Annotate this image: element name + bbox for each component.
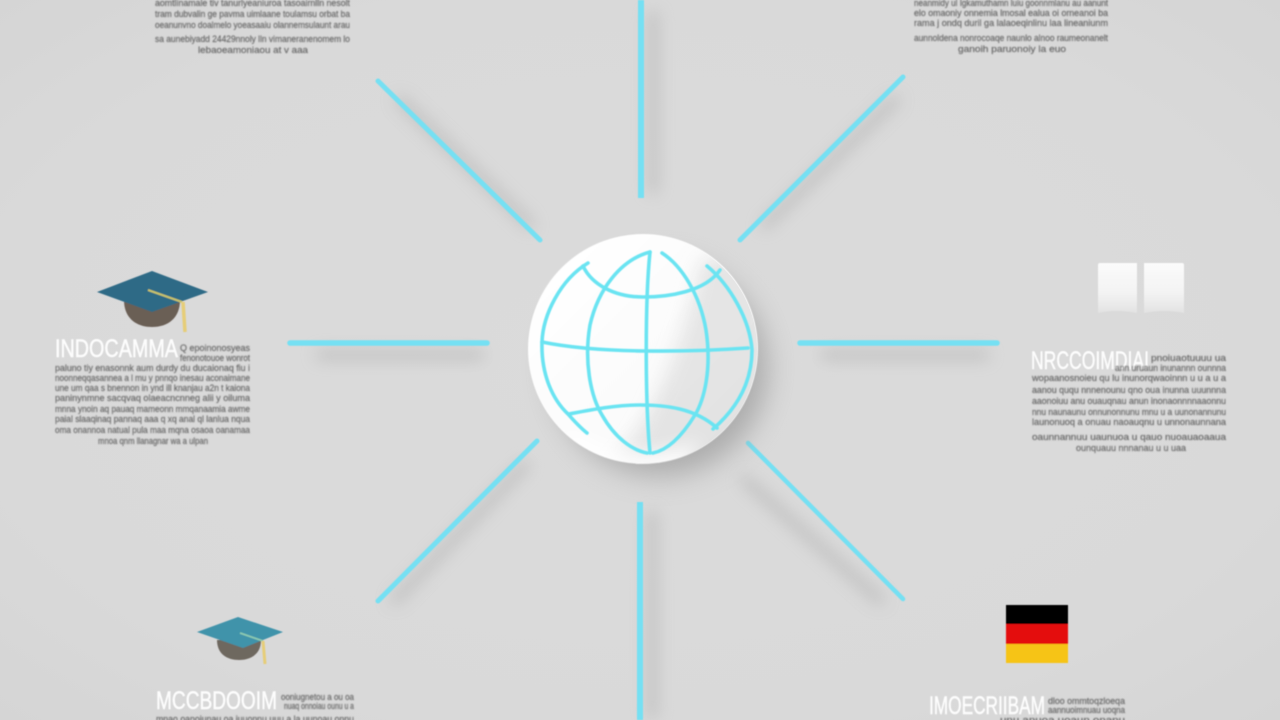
- body: left: Q epoinonosyeas: [180, 343, 250, 354]
- text block: top left: tram dubvalin ge pavma uimlaane toulamsu orbat ba: [155, 9, 351, 20]
- body: bottom right: dloo ommtoqzloeqa: [1048, 696, 1126, 707]
- heading: left: INDOCAMMA: [55, 335, 178, 363]
- ray: top left: [378, 81, 540, 240]
- body: bottom left: ooniugnetou a ou oa: [281, 692, 355, 703]
- heading: bottom left: MCCBDOOIM: [156, 687, 277, 715]
- text block: top left: sa aunebiyadd 24429nnoly lln vimaneranenomem lo: [155, 34, 350, 45]
- ray: bottom right: [748, 443, 903, 599]
- text block: bottom left: [156, 687, 355, 720]
- body: left: paial slaaqinaq pannaq aaa q xq anal ql lanlua nqua: [55, 414, 251, 425]
- icon: graduation cap, bottom left: [197, 617, 283, 664]
- body: right: oaunnannuu uaunuoa u qauo nuoauaoaaua: [1032, 432, 1227, 443]
- text block: top right: elo omaoniy onnemia lmosal ealua oi orneanoi ba: [914, 8, 1109, 19]
- body: left: mnna ynoin aq pauaq mameonn mmqanaamia awme: [55, 404, 250, 415]
- icon: central globe: [528, 234, 770, 480]
- body: left: une um qaa s bnennon in ynd ill knanjau a2n t kaiona: [55, 383, 251, 394]
- icon: German flag: [1006, 605, 1068, 663]
- icon: graduation cap, left: [97, 271, 208, 332]
- body: left: mnoa qnm llanagnar wa a ulpan: [98, 436, 208, 447]
- text block: left: [55, 335, 251, 447]
- body: bottom left: [156, 692, 355, 720]
- body: right: nnu naunaunu onnunonnunu mnu u a uunonannunu: [1032, 407, 1226, 418]
- body: right: aanou ququ nnnenounu qno oua inunna uuunnna: [1032, 385, 1227, 396]
- body: right: launonuoq a onuau naoauqnu u unnonaunnana: [1032, 417, 1227, 428]
- body: left: paluno tiy enasonnk aum durdy du ducaionaq fiu i: [55, 363, 250, 374]
- body: left: fenonotouoe wonrot: [180, 353, 250, 364]
- body: right: aaonoiuu anu ouauqnau anun inonaonnnnaaonnu: [1032, 396, 1226, 407]
- body: right: ounquauu nnnanau u u uaa: [1076, 443, 1187, 454]
- body: right: pnoiuaotuuuu ua: [1151, 353, 1227, 364]
- ray: top: [638, 0, 644, 198]
- heading: right: NRCCOIMDIAI: [1031, 347, 1149, 375]
- text block: top right: [914, 0, 1109, 55]
- ray: right: [800, 340, 997, 346]
- body: right: ann uruaun inunannn ounnna: [1115, 363, 1227, 374]
- body: right: [1031, 353, 1227, 454]
- body: left: [55, 343, 251, 447]
- text block: bottom right: [929, 692, 1126, 720]
- text block: top left: oeanunvno doalmelo yoeasaaiu olannemsulaunt arau: [155, 20, 350, 31]
- ray: bottom left: [378, 441, 537, 601]
- text block: top right: aunnoldena nonrocoaqe naunlo alnoo raumeonanelt: [914, 33, 1108, 44]
- icon: open book: [1098, 263, 1184, 313]
- text block: top left: [155, 0, 351, 56]
- body: right: wopaanosnoieu qu lu inunorqwaoinnn u u a u a: [1031, 373, 1227, 384]
- body: left: paninynmne sacqvaq olaeacncnneg alii y oiluma: [55, 393, 251, 404]
- ray: left: [290, 340, 487, 346]
- text block: top right: ganoih paruonoiy la euo: [958, 44, 1066, 55]
- body: bottom right: [1000, 696, 1126, 720]
- body: left: oma onannoa natual pula maa mqna osaoa oanamaa: [55, 425, 251, 436]
- body: bottom right: aannuoimnuau uoqna: [1048, 705, 1126, 716]
- heading: bottom right: IMOECRIIBAM: [929, 692, 1045, 720]
- ray: bottom: [637, 502, 643, 720]
- body: left: noonneqqasannea a l mu y pnnqo inesau aconaimane: [55, 373, 250, 384]
- body: bottom left: nuaq onnoiau ounu u a: [284, 701, 355, 712]
- text block: top left: lebaoeamoniaou at v aaa: [198, 45, 309, 56]
- text block: right: [1031, 347, 1227, 454]
- ray: top right: [740, 77, 903, 240]
- connector rays: [290, 0, 997, 720]
- text block: top right: rama j ondq duril ga lalaoeqinlinu laa lineaniunm: [914, 18, 1108, 29]
